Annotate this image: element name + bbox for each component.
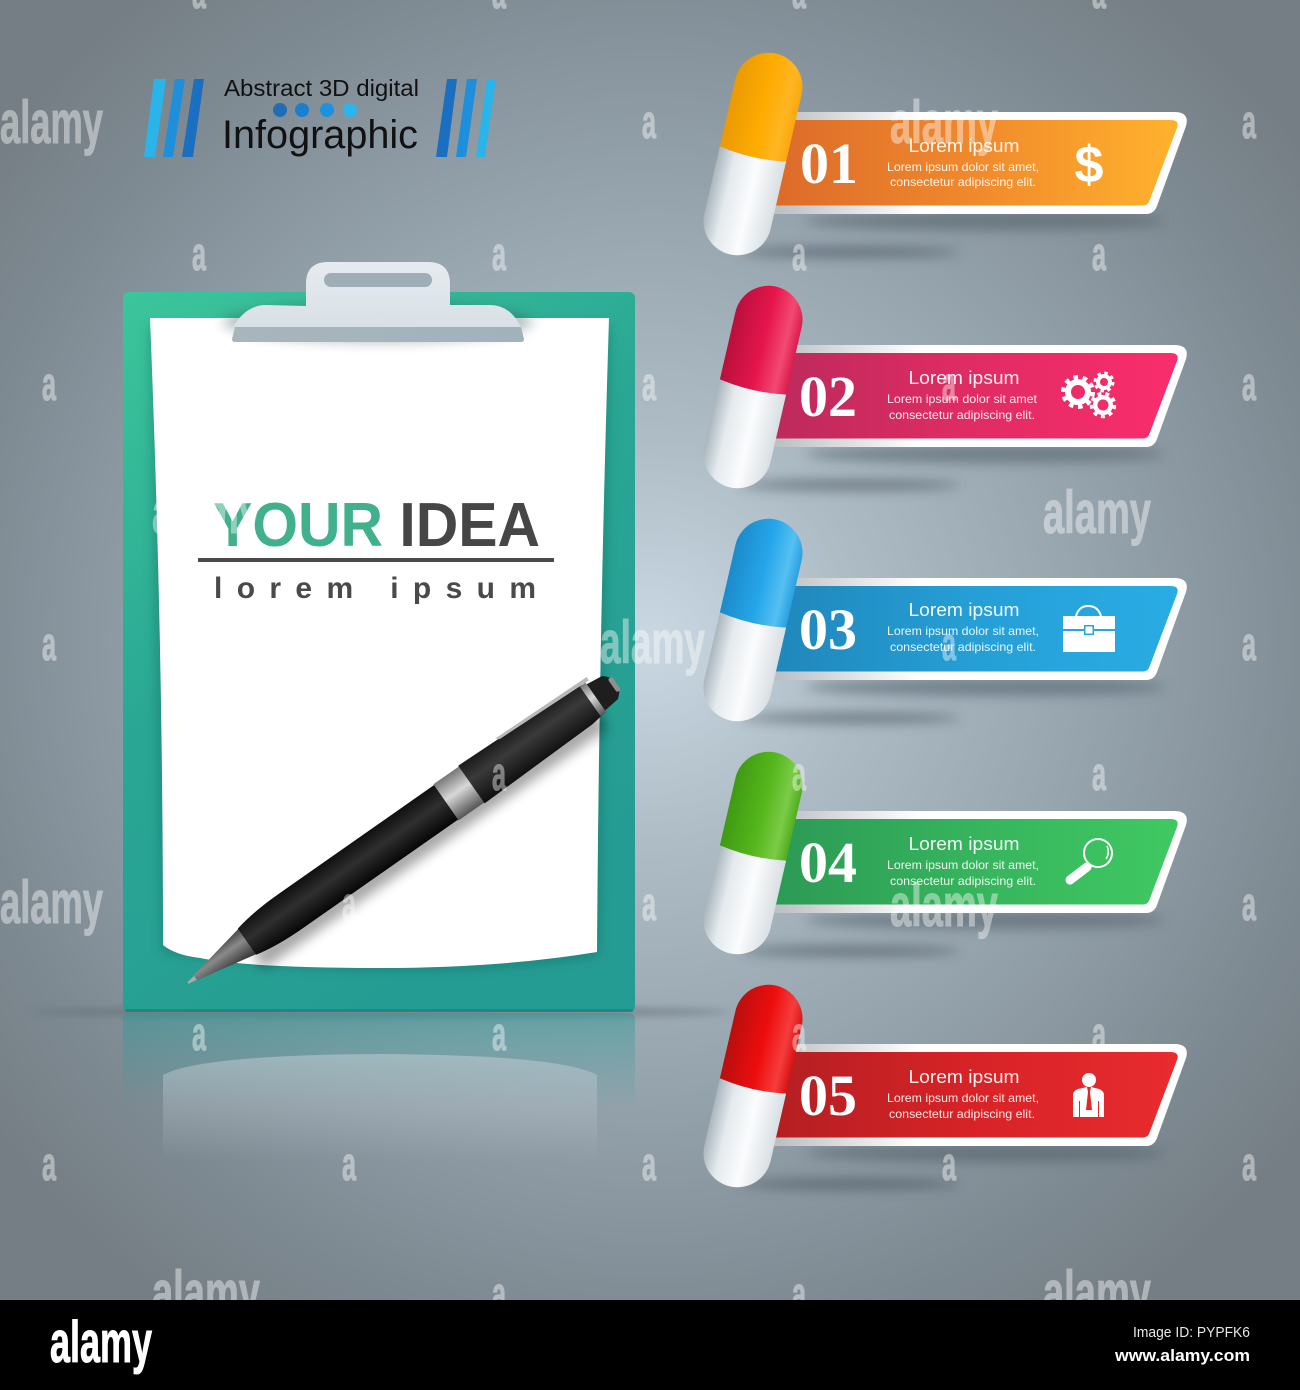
watermark grid: a <box>1242 357 1256 410</box>
clipboard <box>123 262 635 1012</box>
tip cone <box>186 927 259 991</box>
watermark grid: a <box>492 1267 506 1320</box>
text: Lorem ipsum <box>908 368 1020 388</box>
shadows <box>805 1144 1165 1162</box>
watermark grid: a <box>42 357 56 410</box>
needle <box>187 975 198 985</box>
pill <box>697 46 809 262</box>
item 02 <box>697 279 1187 495</box>
text: Lorem ipsum <box>908 834 1020 854</box>
icon: gears <box>1064 373 1114 416</box>
watermark grid: alamy <box>0 869 103 936</box>
watermark grid: a <box>192 227 206 280</box>
item 04 <box>697 745 1187 961</box>
watermark grid: a <box>642 95 656 148</box>
dots <box>273 103 357 117</box>
heading line 2: Infographic <box>222 113 418 157</box>
lower barrel <box>235 785 459 959</box>
item 02: consectetur adipiscing elit. <box>889 408 1035 422</box>
icon: dollar: $ <box>1075 136 1104 194</box>
watermark grid: a <box>1242 617 1256 670</box>
icon: briefcase <box>1063 606 1115 652</box>
paper <box>150 318 609 968</box>
watermark grid: a <box>1242 95 1256 148</box>
watermark grid: a <box>942 617 956 670</box>
watermark grid: a <box>1092 1007 1106 1060</box>
watermark grid: a <box>492 1007 506 1060</box>
item 01: consectetur adipiscing elit. <box>890 175 1036 189</box>
watermark grid: a <box>342 877 356 930</box>
banner <box>770 578 1187 680</box>
footer bar <box>0 1300 1300 1390</box>
board <box>123 292 635 1012</box>
banner <box>770 1044 1187 1146</box>
subtitle: lorem ipsum <box>214 572 536 605</box>
watermark grid: a <box>1242 1137 1256 1190</box>
pill <box>697 279 809 495</box>
watermark grid: a <box>1092 227 1106 280</box>
watermark grid: a <box>1092 747 1106 800</box>
icon: magnifier <box>1070 839 1112 880</box>
watermark grid: a <box>792 1007 806 1060</box>
clip <box>232 262 524 342</box>
clipboard reflection <box>123 1013 635 1160</box>
left stripes <box>144 79 204 157</box>
watermark grid: a <box>42 1137 56 1190</box>
url: www.alamy.com <box>1114 1346 1250 1365</box>
watermark grid: a <box>342 1137 356 1190</box>
header logo <box>144 75 496 157</box>
watermark grid: a <box>642 357 656 410</box>
watermark grid: alamy <box>0 89 103 156</box>
item 05 <box>697 978 1187 1194</box>
icon: person <box>1073 1073 1104 1117</box>
pill <box>697 745 809 961</box>
watermark grid: a <box>492 227 506 280</box>
cap <box>587 670 626 710</box>
item 05: Lorem ipsum dolor sit amet, <box>887 1091 1039 1105</box>
heading line 1: Abstract 3D digital <box>224 75 419 101</box>
item 03 <box>697 512 1187 728</box>
watermark grid: alamy <box>890 872 998 939</box>
banner <box>770 345 1187 447</box>
shadows <box>805 212 1165 230</box>
watermark grid: a <box>642 1137 656 1190</box>
pill <box>697 978 809 1194</box>
metal band <box>433 766 485 820</box>
image id: Image ID: PYPFK6 <box>1133 1324 1250 1341</box>
number: 04 <box>799 830 857 895</box>
number: 05 <box>799 1063 857 1128</box>
number: 01 <box>800 131 858 196</box>
item 02: Lorem ipsum dolor sit amet <box>887 392 1038 406</box>
item 05: consectetur adipiscing elit. <box>889 1107 1035 1121</box>
banner <box>770 811 1187 913</box>
shadows <box>805 445 1165 463</box>
number: 02 <box>799 364 857 429</box>
shadows <box>805 678 1165 696</box>
ring <box>580 683 606 716</box>
watermark grid: alamy <box>600 609 705 676</box>
text: Lorem ipsum <box>908 600 1020 620</box>
item 04: consectetur adipiscing elit. <box>890 874 1036 888</box>
item 03: Lorem ipsum dolor sit amet, <box>887 624 1039 638</box>
shadows <box>805 911 1165 929</box>
underline <box>198 558 554 562</box>
watermark grid: alamy <box>152 1259 260 1326</box>
item 01 <box>697 46 1187 262</box>
watermark grid: a <box>792 227 806 280</box>
banner <box>770 112 1187 214</box>
watermark grid: a <box>642 877 656 930</box>
watermark grid: a <box>492 747 506 800</box>
right stripes <box>436 79 496 157</box>
pen <box>174 663 635 1009</box>
watermark grid: a <box>942 357 956 410</box>
upper barrel <box>458 681 606 803</box>
clip shadow <box>223 302 533 342</box>
watermark grid: alamy <box>152 479 260 546</box>
clipboard ground shadow <box>30 1006 730 1018</box>
item 01: Lorem ipsum dolor sit amet, <box>887 160 1039 174</box>
pen clip <box>495 675 589 743</box>
watermark grid: alamy <box>1043 1259 1151 1326</box>
paper shadow <box>150 326 609 969</box>
watermark grid: alamy <box>1043 479 1151 546</box>
watermark grid: alamy <box>890 89 998 156</box>
watermark grid: a <box>1242 877 1256 930</box>
item 03: consectetur adipiscing elit. <box>890 640 1036 654</box>
number: 03 <box>799 597 857 662</box>
watermark grid: a <box>792 747 806 800</box>
item 04: Lorem ipsum dolor sit amet, <box>887 858 1039 872</box>
watermark grid: a <box>792 1267 806 1320</box>
watermark grid: a <box>42 617 56 670</box>
pill <box>697 512 809 728</box>
footer logo: alamy <box>50 1310 152 1375</box>
text: Lorem ipsum <box>908 136 1020 156</box>
title: your idea: YOUR IDEA <box>213 491 540 560</box>
text: Lorem ipsum <box>908 1067 1020 1087</box>
watermark grid: a <box>942 1137 956 1190</box>
pen shadow <box>252 712 608 969</box>
watermark grid: a <box>192 1007 206 1060</box>
